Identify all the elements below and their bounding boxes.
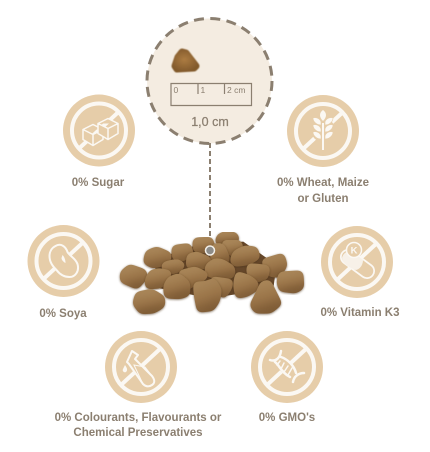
- item: 0% Soya: [28, 225, 100, 320]
- icon: no sugar cubes: [63, 94, 135, 166]
- ruler: 2 cm: [227, 85, 245, 95]
- icon: single kibble: [175, 52, 196, 69]
- icon: no soya bean: [28, 225, 100, 297]
- label: or Gluten: [297, 193, 349, 205]
- icon: no vitamin capsule: K: [351, 246, 358, 256]
- label: 0% Soya: [39, 308, 87, 320]
- label: 0% GMO's: [259, 412, 315, 424]
- icon: no test tube: [105, 331, 177, 403]
- size callout circle: [147, 18, 272, 144]
- icon: no DNA helix: [251, 331, 323, 403]
- icon: no wheat: [287, 95, 359, 167]
- ruler: [171, 84, 252, 106]
- label: 0% Sugar: [72, 177, 125, 189]
- label: 0% Wheat, Maize: [277, 177, 369, 189]
- kibble pile: [123, 234, 301, 311]
- item: 0% GMO's: [251, 331, 323, 424]
- label: 0% Colourants, Flavourants or: [55, 412, 222, 424]
- ruler: 0: [174, 85, 178, 95]
- item: 0% Sugar: [63, 94, 135, 189]
- item: 0% Colourants, Flavourants or Chemical Preservatives: [55, 331, 222, 439]
- item: 0% Vitamin K3: [320, 226, 400, 319]
- dashed connector line: [209, 143, 211, 241]
- label: 0% Vitamin K3: [320, 307, 400, 319]
- size label: 1,0 cm: [191, 115, 229, 129]
- connector marker dot: [206, 246, 214, 255]
- item: 0% Wheat, Maize or Gluten: [277, 95, 369, 205]
- label: Chemical Preservatives: [73, 427, 203, 439]
- ruler: 1: [200, 85, 206, 95]
